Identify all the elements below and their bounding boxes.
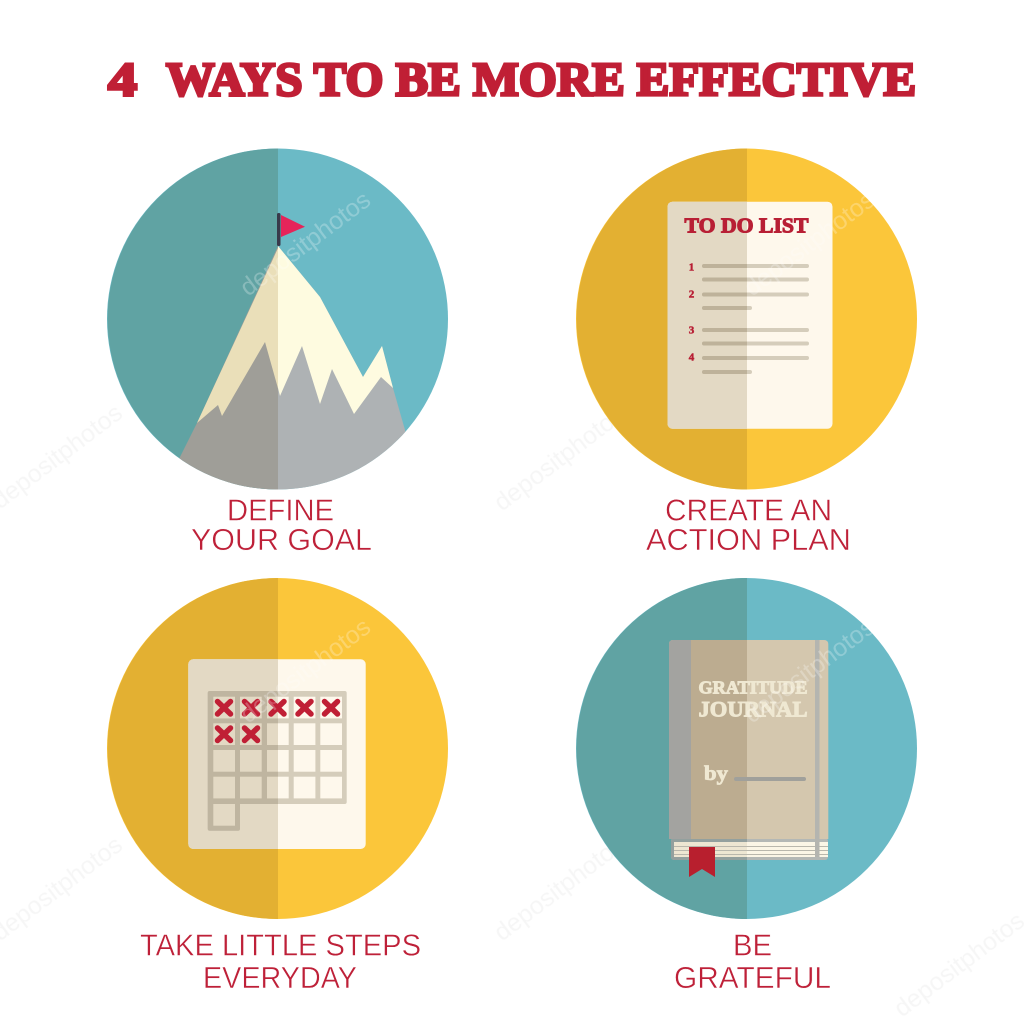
panel: define your goal — [107, 148, 448, 557]
panel: take little steps everyday — [107, 578, 448, 995]
watermark text over circles: depositphotos — [235, 186, 376, 302]
label: be grateful — [674, 928, 831, 995]
label: be grateful: BE — [733, 928, 772, 962]
watermark text over circles: depositphotos — [739, 186, 880, 302]
icon: to do list sheet: 3 — [689, 324, 695, 336]
background watermark text — [0, 399, 1024, 1023]
label: define your goal — [191, 492, 372, 557]
title: WAYS TO BE MORE EFFECTIVE — [166, 54, 916, 106]
icon: to do list sheet: 2 — [689, 288, 695, 300]
label: take little steps everyday: EVERYDAY — [203, 960, 357, 995]
circle: yellow background — [107, 578, 448, 919]
icon: calendar with crosses — [188, 659, 366, 849]
title: 4 — [108, 54, 137, 106]
label: create an action plan: CREATE AN — [665, 492, 832, 528]
circle: yellow background — [576, 148, 917, 490]
icon: mountain with flag — [180, 213, 406, 490]
icon: to do list sheet: 1 — [689, 262, 694, 274]
background watermark text: depositphotos — [489, 831, 630, 947]
label: take little steps everyday — [140, 928, 421, 995]
icon: gratitude journal — [669, 640, 828, 877]
watermark text over circles: depositphotos — [739, 613, 880, 729]
watermark text over circles — [235, 186, 880, 729]
icon: gratitude journal: JOURNAL — [698, 696, 808, 722]
label: create an action plan — [646, 492, 851, 557]
label: define your goal: DEFINE — [227, 492, 334, 528]
panel: be grateful — [576, 578, 917, 995]
background watermark text: depositphotos — [489, 401, 630, 517]
icon: to do list sheet — [668, 202, 832, 429]
circle: teal background — [107, 148, 448, 490]
icon: to do list sheet: TO DO LIST — [684, 214, 808, 238]
icon: gratitude journal: GRATITUDE — [698, 678, 808, 698]
watermark text over circles: depositphotos — [235, 613, 376, 729]
circle: teal background — [576, 578, 917, 919]
label: create an action plan: ACTION PLAN — [646, 522, 851, 557]
panel: create an action plan — [576, 148, 917, 557]
icon: gratitude journal: by — [704, 761, 729, 785]
label: take little steps everyday: TAKE LITTLE STEPS — [140, 928, 421, 962]
icon: to do list sheet: 4 — [689, 352, 695, 364]
label: define your goal: YOUR GOAL — [191, 522, 372, 557]
label: be grateful: GRATEFUL — [674, 960, 831, 995]
